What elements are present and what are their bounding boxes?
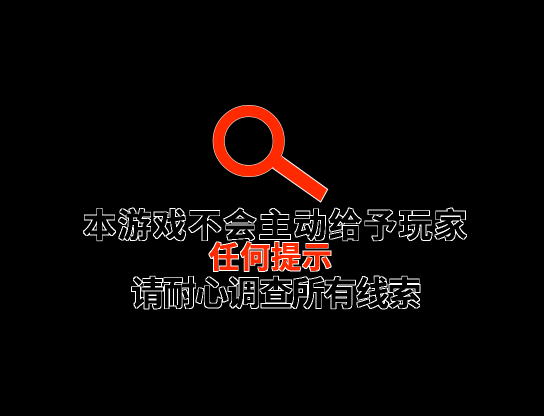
text line 3: 请耐心调查所有线索 bbox=[131, 275, 421, 312]
icon: magnifying glass bbox=[219, 111, 328, 202]
text line 2: red highlight: 任何提示 bbox=[209, 242, 332, 275]
text line 1: 本游戏不会主动给予玩家 bbox=[83, 207, 467, 244]
